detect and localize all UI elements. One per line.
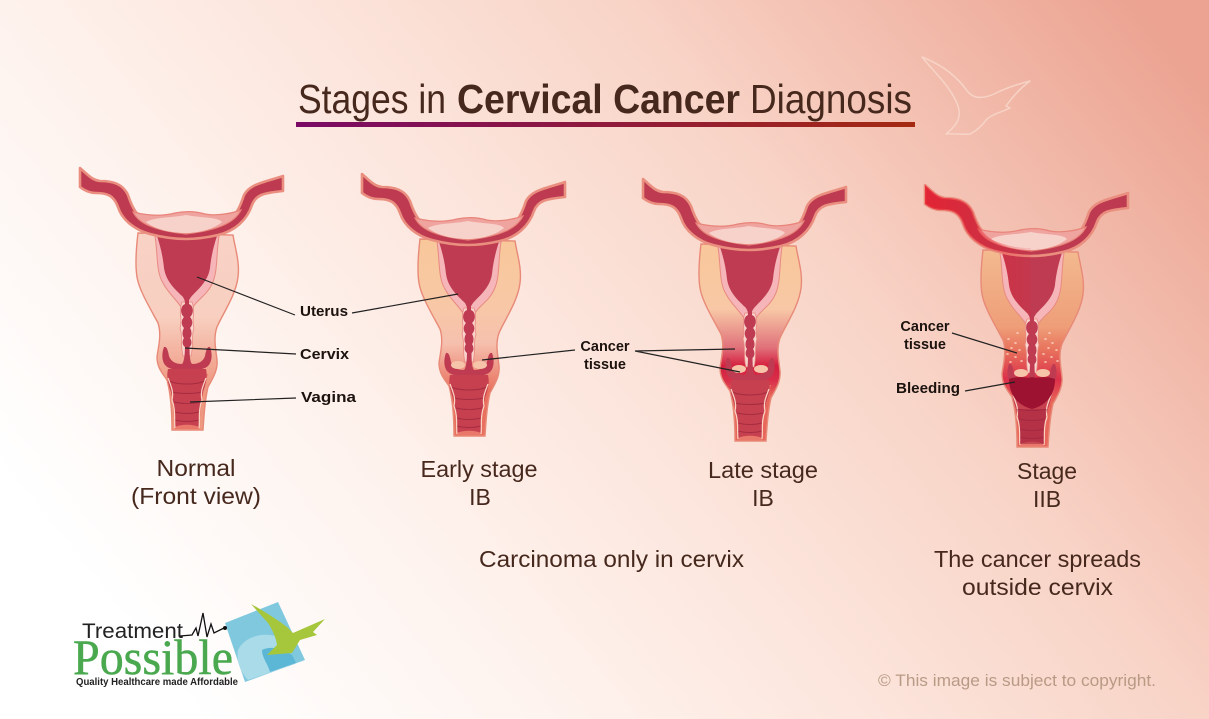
text: carcinoma only in cervix: Carcinoma only in cervix	[479, 546, 745, 572]
icon: pulse line	[180, 613, 224, 637]
icon: blue globe square	[225, 602, 305, 682]
text: the cancer spreads outside cervix: The cancer spreads	[934, 546, 1141, 572]
leader lines and labels: normal: Vagina	[301, 390, 357, 406]
caption: early stage: Early stage	[420, 456, 538, 482]
logo: Treatment Possible: Possible	[73, 629, 233, 685]
caption: early stage: IB	[469, 484, 491, 510]
body wall	[136, 233, 238, 430]
caption: late stage: Late stage	[708, 457, 818, 483]
text: the cancer spreads outside cervix	[934, 546, 1141, 600]
uterus and canal	[155, 236, 219, 362]
title: Cervical Cancer	[457, 76, 740, 122]
logo: Treatment Possible	[73, 602, 325, 688]
caption: stage IIB: Stage	[1017, 458, 1077, 484]
leader lines and labels: normal: Cervix	[300, 347, 349, 363]
title: Diagnosis	[750, 76, 912, 122]
title: Stages in	[298, 76, 446, 122]
logo: Treatment Possible: Treatment	[82, 620, 183, 643]
caption: stage IIB: IIB	[1033, 486, 1061, 512]
caption: late stage: IB	[752, 485, 774, 511]
leader lines and labels: normal: Uterus	[300, 304, 348, 320]
fallopian tubes	[80, 168, 283, 239]
caption: late stage	[708, 457, 818, 511]
logo: Treatment Possible: Quality Healthcare made Affordable	[76, 677, 238, 688]
cancer dots	[1007, 333, 1058, 362]
label: cancer tissue early and late	[482, 339, 740, 373]
icon: green bird	[251, 604, 325, 655]
caption: normal: Normal	[156, 455, 236, 481]
bleeding	[1009, 377, 1055, 409]
label: cancer tissue and bleeding stage IIB	[896, 319, 1017, 397]
label: cancer tissue early and late: tissue	[584, 357, 626, 373]
caption: stage IIB	[1017, 458, 1077, 512]
diagram: early stage IB	[362, 174, 565, 436]
label: cancer tissue and bleeding stage IIB: Bleeding	[896, 381, 960, 397]
leader line: uterus early stage	[352, 294, 458, 313]
title	[296, 76, 915, 127]
diagram: late stage IB	[643, 179, 846, 441]
red tint on left tube and uterus	[925, 185, 1031, 321]
copyright note: © This image is subject to copyright.	[878, 671, 1156, 690]
caption: normal: (Front view)	[131, 483, 261, 509]
icon: bird watermark	[922, 57, 1030, 134]
caption: normal	[131, 455, 261, 509]
label: cancer tissue and bleeding stage IIB: Cancer	[900, 319, 950, 335]
label: cancer tissue and bleeding stage IIB: tissue	[904, 337, 946, 353]
caption: early stage	[420, 456, 538, 510]
text: the cancer spreads outside cervix: outside cervix	[962, 574, 1114, 600]
leader lines and labels: normal	[185, 277, 357, 406]
cervix and vagina	[162, 345, 212, 429]
diagram: normal	[80, 168, 283, 430]
diagram: stage IIB	[925, 185, 1128, 447]
label: cancer tissue early and late: Cancer	[580, 339, 630, 355]
